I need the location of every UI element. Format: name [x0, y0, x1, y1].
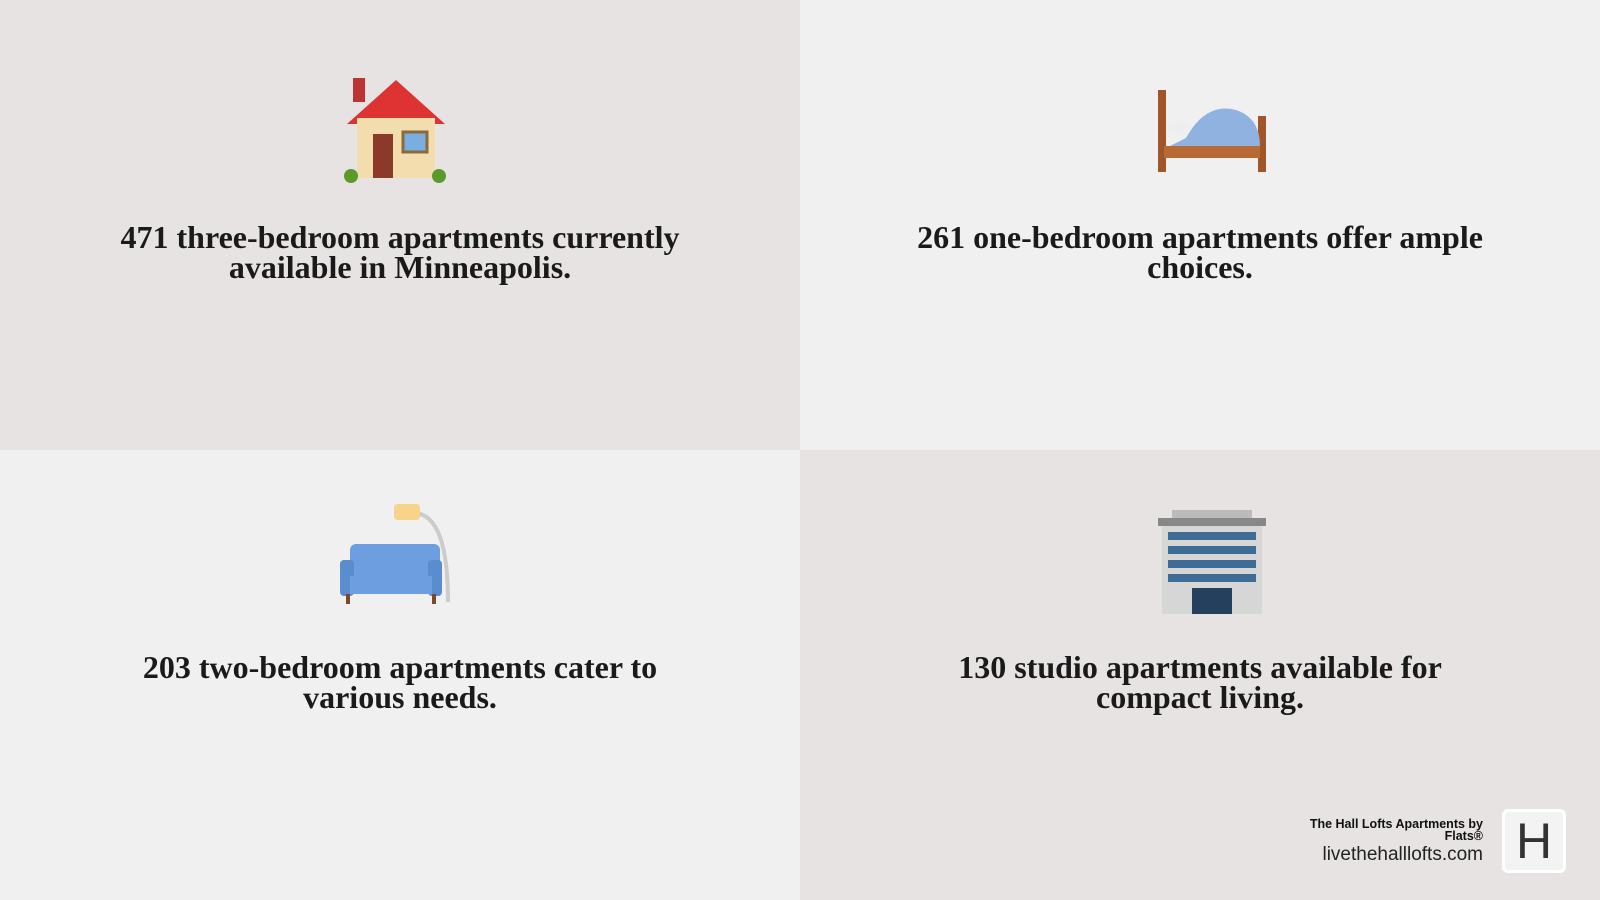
icon: office building: [1158, 510, 1266, 614]
text: studio stat: compact living.: [1096, 679, 1304, 715]
text: two-bedroom stat: various needs.: [303, 679, 497, 715]
text: three-bedroom stat: available in Minneapolis.: [229, 249, 571, 285]
icon: bed: [1158, 90, 1266, 172]
footer: brand: [1310, 809, 1566, 873]
panel: two-bedroom: [0, 450, 800, 900]
text: studio stat: [958, 649, 1442, 715]
text: studio stat: 130 studio apartments available for: [958, 649, 1442, 685]
text: one-bedroom stat: [917, 219, 1483, 285]
panel: one-bedroom: [800, 0, 1600, 450]
text: brand name: The Hall Lofts Apartments by: [1310, 817, 1483, 831]
text: three-bedroom stat: 471 three-bedroom apartments currently: [120, 219, 680, 255]
text: two-bedroom stat: 203 two-bedroom apartments cater to: [143, 649, 657, 685]
text: three-bedroom stat: [120, 219, 680, 285]
logo: H: [1502, 809, 1566, 873]
logo: H: H: [1516, 813, 1552, 869]
text: one-bedroom stat: 261 one-bedroom apartments offer ample: [917, 219, 1483, 255]
panel: studio: [800, 450, 1600, 900]
icon: couch with lamp: [340, 504, 450, 604]
icon: house: [344, 78, 446, 183]
text: brand name: Flats®: [1445, 829, 1483, 843]
text: brand name: [1310, 817, 1483, 843]
panel: three-bedroom: [0, 0, 800, 450]
text: url: livethehalllofts.com: [1322, 844, 1483, 865]
text: one-bedroom stat: choices.: [1147, 249, 1253, 285]
text: two-bedroom stat: [143, 649, 657, 715]
